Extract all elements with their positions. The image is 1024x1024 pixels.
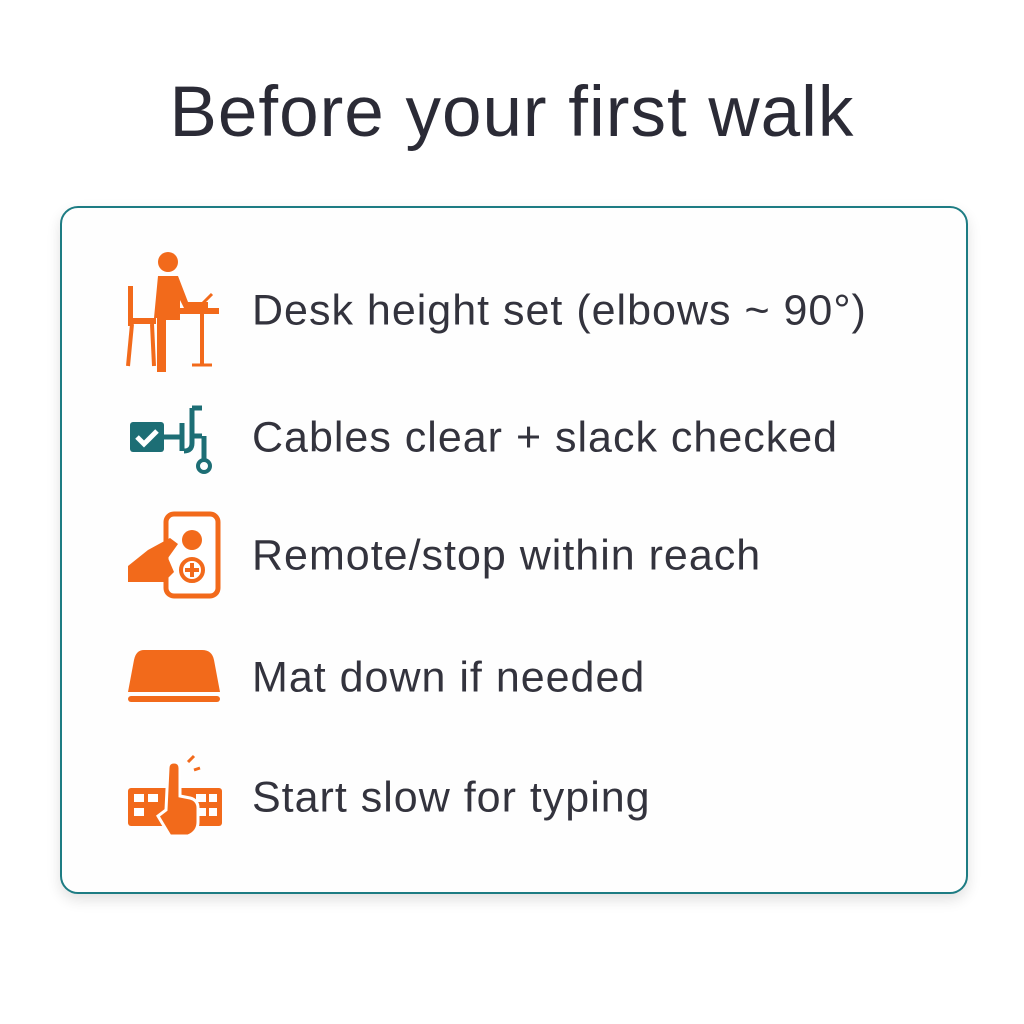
icon: checkbox and cable xyxy=(130,406,212,474)
title: Before your first walk xyxy=(170,73,854,152)
row: remote: Remote/stop within reach xyxy=(252,532,761,580)
icon: hand with remote xyxy=(128,512,220,598)
row: desk height xyxy=(126,252,867,372)
icon: person at desk xyxy=(126,252,219,372)
row: mat: Mat down if needed xyxy=(252,654,645,702)
row: cables xyxy=(130,406,838,474)
row: typing xyxy=(128,755,651,834)
icon: mat xyxy=(128,650,220,702)
row: typing: Start slow for typing xyxy=(252,774,651,822)
row: cables: Cables clear + slack checked xyxy=(252,414,838,462)
icon: keyboard and finger xyxy=(128,755,222,834)
row: desk height: Desk height set (elbows ~ 90°) xyxy=(252,286,867,334)
panel: checklist xyxy=(60,206,968,894)
row: remote xyxy=(128,512,761,598)
